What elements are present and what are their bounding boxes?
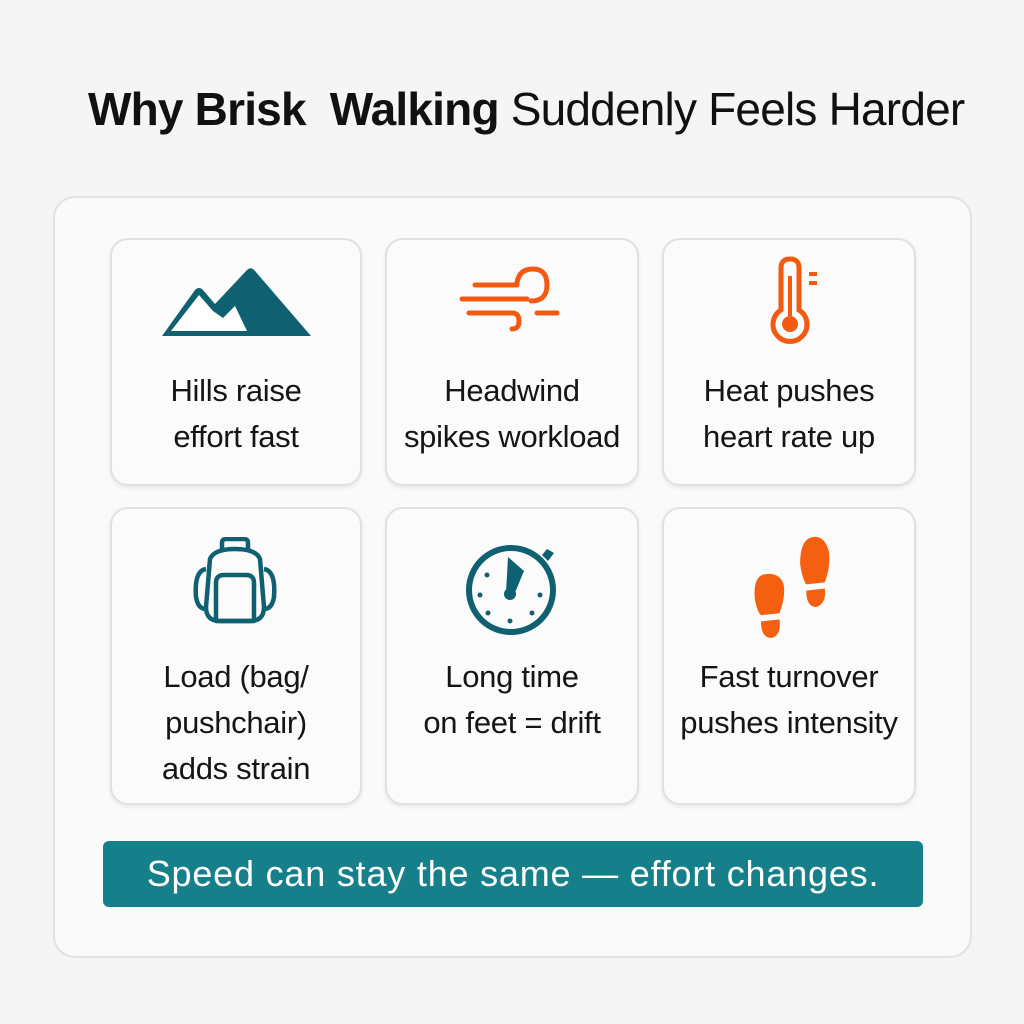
text bbox=[170, 373, 302, 454]
text: pushes intensity bbox=[680, 705, 898, 740]
text: heart rate up bbox=[703, 419, 875, 454]
text: adds strain bbox=[162, 751, 310, 786]
text bbox=[423, 659, 601, 740]
text: Load (bag/ bbox=[163, 659, 309, 694]
card: time bbox=[385, 507, 639, 805]
text: effort fast bbox=[173, 419, 299, 454]
banner: Speed can stay the same — effort changes. bbox=[147, 853, 879, 894]
icon: footprints bbox=[754, 536, 830, 638]
panel: main bbox=[53, 196, 972, 958]
text bbox=[162, 659, 310, 786]
text: Headwind bbox=[444, 373, 580, 408]
text bbox=[404, 373, 620, 454]
text bbox=[680, 659, 898, 740]
text: Fast turnover bbox=[700, 659, 878, 694]
text: on feet = drift bbox=[423, 705, 601, 740]
card: headwind bbox=[385, 238, 639, 486]
text: spikes workload bbox=[404, 419, 620, 454]
icon: mountain bbox=[162, 268, 311, 336]
icon: backpack bbox=[193, 537, 277, 624]
icon: thermometer bbox=[770, 256, 817, 344]
text: Heat pushes bbox=[704, 373, 874, 408]
text: Long time bbox=[445, 659, 579, 694]
card: heat bbox=[662, 238, 916, 486]
text: pushchair) bbox=[165, 705, 307, 740]
title: Why Brisk Walking Suddenly Feels Harder bbox=[88, 83, 964, 135]
text bbox=[703, 373, 875, 454]
card: load bbox=[110, 507, 362, 805]
icon: wind bbox=[460, 266, 560, 332]
card: turnover bbox=[662, 507, 916, 805]
icon: stopwatch bbox=[466, 545, 556, 635]
banner bbox=[103, 841, 923, 907]
card: hills bbox=[110, 238, 362, 486]
text: Hills raise bbox=[170, 373, 302, 408]
